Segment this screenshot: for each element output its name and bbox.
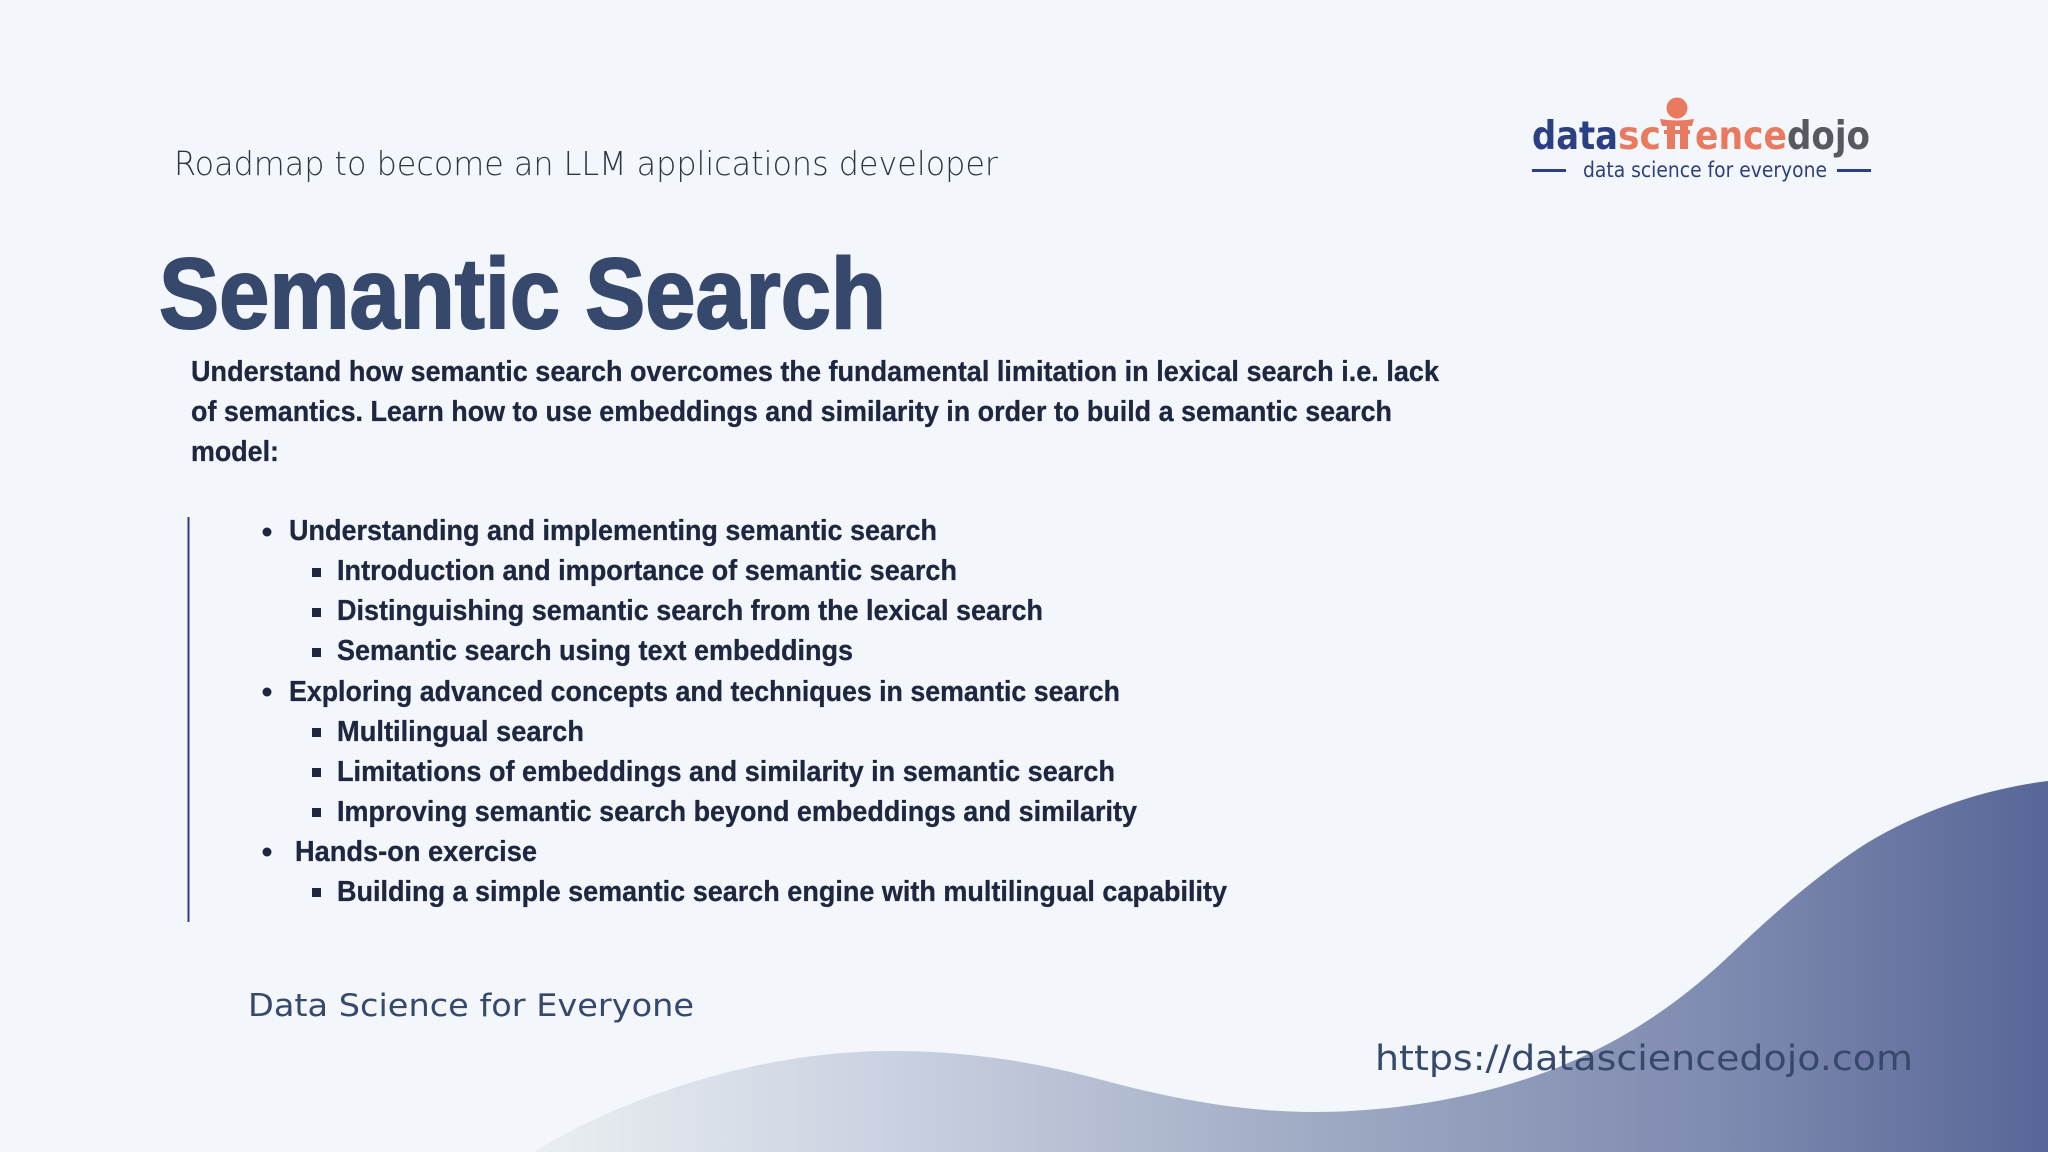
intro paragraph: of semantics. Learn how to use embeddings and similarity in order to build a semantic search (191, 396, 1392, 428)
intro paragraph (191, 356, 1440, 468)
list item 2: Multilingual search (337, 716, 584, 748)
list item 1: Understanding and implementing semantic search (289, 515, 937, 547)
intro paragraph: Understand how semantic search overcomes the fundamental limitation in lexical search i.e. lack (191, 356, 1440, 388)
footer tagline: Data Science for Everyone (248, 988, 694, 1024)
logo tagline: data science for everyone (1583, 158, 1827, 182)
list item 1: Introduction and importance of semantic search (337, 555, 957, 587)
list item 2: Limitations of embeddings and similarity in semantic search (337, 756, 1115, 788)
subtitle: Roadmap to become an LLM applications developer (174, 144, 998, 183)
logo tagline rule left (1532, 169, 1566, 172)
decorative wave (534, 781, 2048, 1152)
list accent bar (188, 517, 190, 922)
logo tagline rule right (1837, 169, 1871, 172)
list item 3: Building a simple semantic search engine with multilingual capability (337, 876, 1227, 908)
topic list (262, 515, 1227, 908)
list item 3 (262, 836, 1227, 908)
logo icon: torii figure (1660, 98, 1694, 149)
list item 2: Improving semantic search beyond embeddings and similarity (337, 796, 1137, 828)
logo (1532, 98, 1871, 182)
list item 1: Semantic search using text embeddings (337, 635, 853, 667)
logo wordmark: data: data (1532, 114, 1618, 159)
website url: https://datasciencedojo.com (1375, 1039, 1913, 1079)
logo wordmark: dojo: dojo (1787, 114, 1870, 159)
logo wordmark: ence: ence (1695, 114, 1787, 159)
list item 1: Distinguishing semantic search from the lexical search (337, 595, 1043, 627)
list item 2: Exploring advanced concepts and techniques in semantic search (289, 676, 1120, 708)
intro paragraph: model: (191, 436, 279, 468)
list item 3: Hands-on exercise (295, 836, 537, 868)
title: Semantic Search (159, 238, 886, 350)
logo wordmark: sc: sc (1618, 114, 1661, 159)
list item 2 (262, 676, 1137, 828)
list item 1 (262, 515, 1043, 667)
